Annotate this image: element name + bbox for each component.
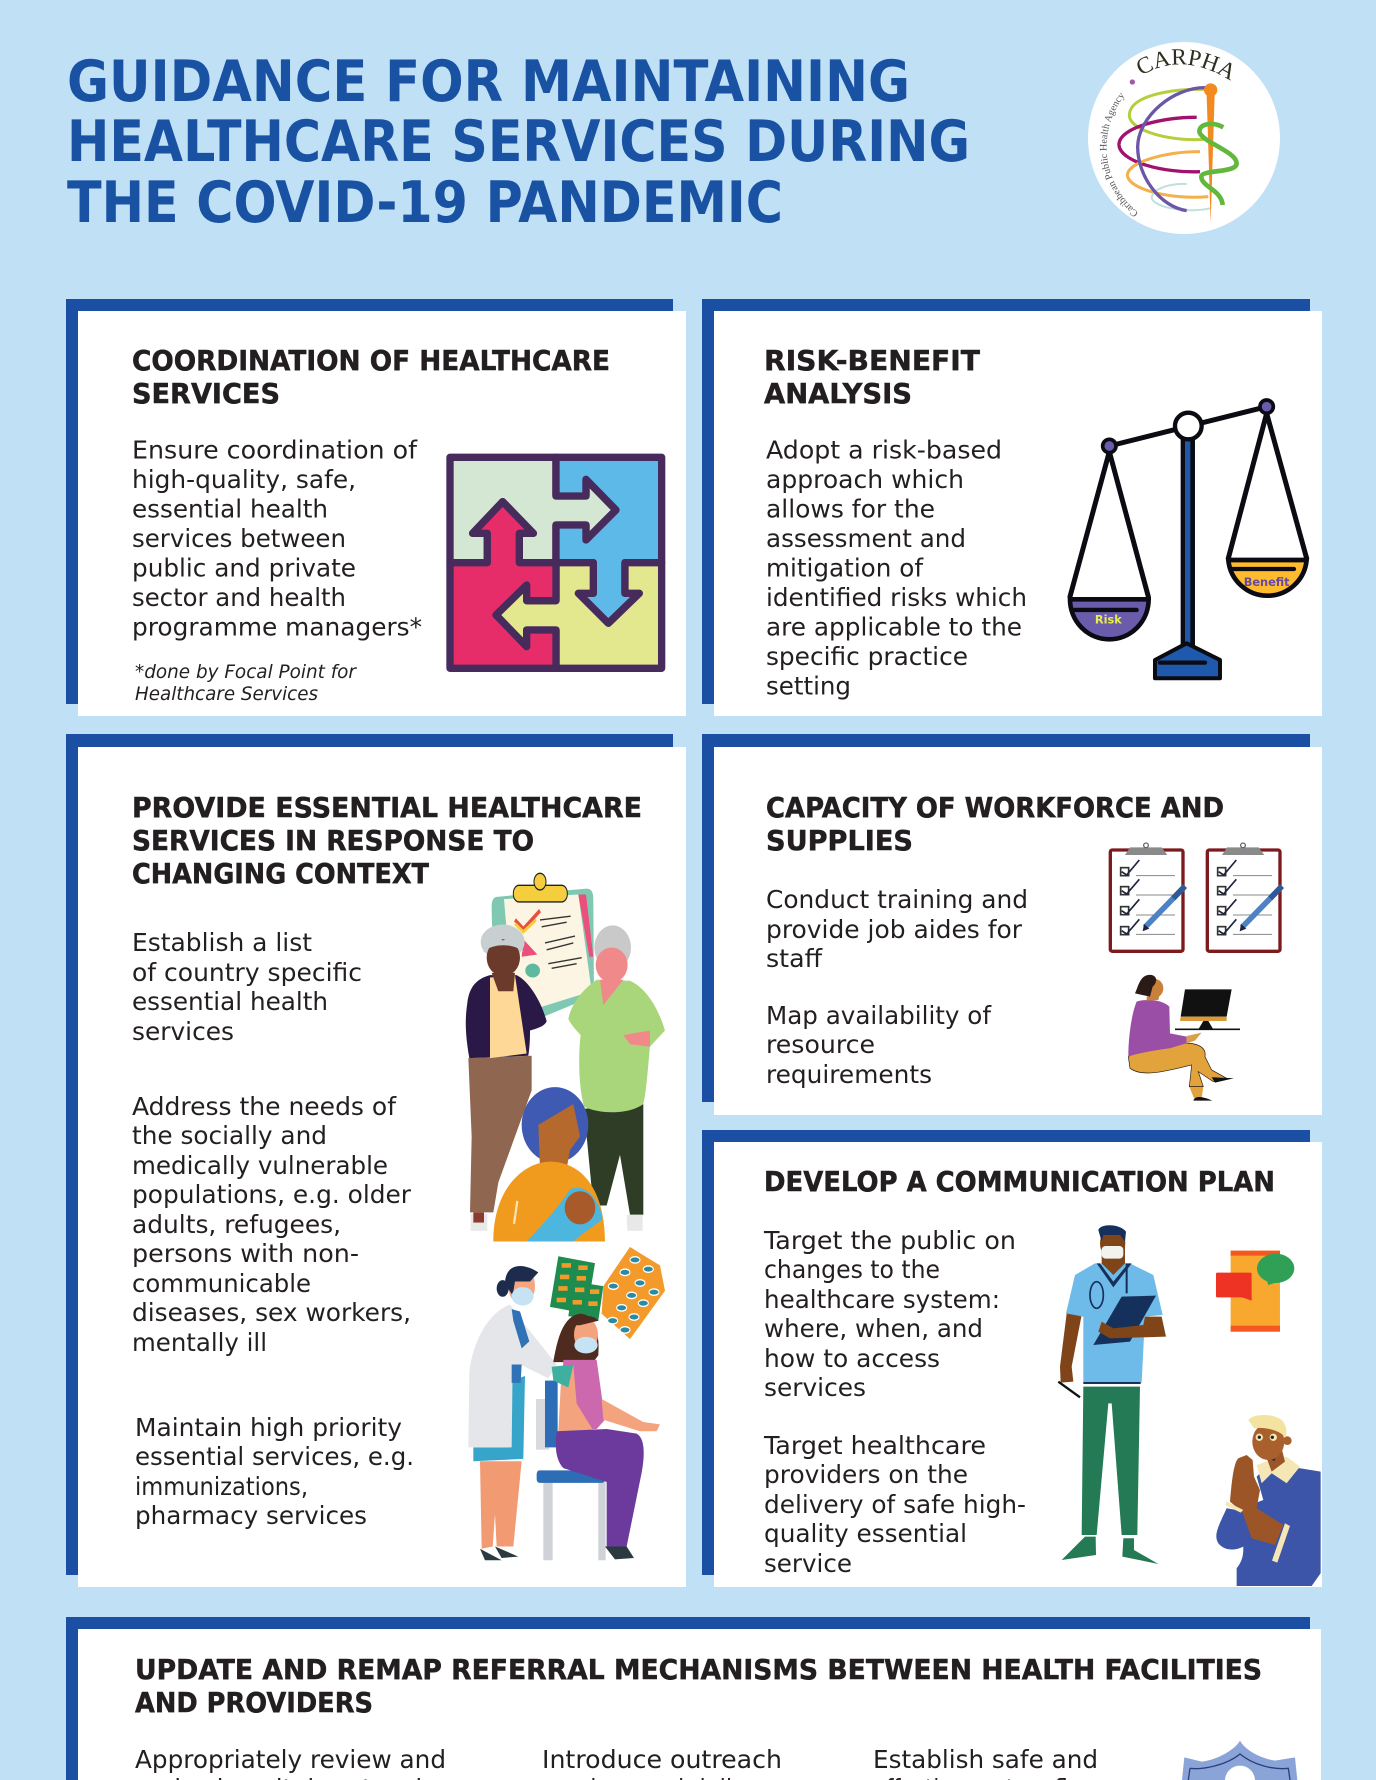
heading: referral: UPDATE AND REMAP REFERRAL MECHANISMS BETWEEN HEALTH FACILITIES [135,1653,1262,1686]
text: risk-benefit body: identified risks which [766,583,1027,612]
text: vulnerable populations: Address the needs of [132,1092,397,1121]
text: vulnerable populations: persons with non- [132,1239,359,1268]
text: vulnerable populations: populations, e.g. older [132,1180,412,1209]
text: coordination body: essential health [132,494,328,524]
text: outreach: Introduce outreach [542,1745,782,1774]
text: training: staff [766,944,823,973]
text: target the public: healthcare system: [764,1285,1000,1314]
text: target the public: where, when, and [764,1314,983,1343]
text: target providers: Target healthcare [763,1431,986,1460]
heading: risk-benefit: ANALYSIS [764,377,912,410]
text: vulnerable populations: mentally ill [132,1328,267,1357]
text: target providers: delivery of safe high- [764,1490,1026,1519]
heading: capacity [766,791,1224,857]
text: coordination body: services between [132,524,346,553]
text: coordination body: high-quality, safe, [132,465,356,494]
heading: referral: AND PROVIDERS [135,1686,373,1719]
text: high priority services: Maintain high priority [135,1413,402,1442]
text: high priority services [135,1413,414,1530]
text: country list: essential health [132,987,328,1016]
title [67,49,970,236]
text: risk-benefit body: approach which [766,465,964,494]
icon: balance scales: Risk [1095,612,1122,626]
title: GUIDANCE FOR MAINTAINING [67,49,910,115]
text: resources [766,1001,992,1089]
footnote: *done by Focal Point for [135,661,357,683]
text: resources: requirements [766,1060,932,1089]
heading: essential services: PROVIDE ESSENTIAL HEALTHCARE [132,791,642,824]
text: coordination body: sector and health [132,583,346,612]
heading: risk-benefit [764,344,980,410]
panel: update and remap referral mechanisms [66,1617,1321,1780]
heading: referral [135,1653,1262,1719]
text: country list: services [132,1017,234,1046]
heading: risk-benefit: RISK-BENEFIT [764,344,980,377]
panel: develop a communication plan [702,1130,1322,1587]
illustration: woman at computer [1128,975,1240,1101]
icon: balance scales: Benefit [1244,575,1290,589]
icon: shield [1182,1741,1297,1780]
footnote [135,661,357,705]
text: target the public: changes to the [764,1255,940,1284]
text: risk-benefit body: setting [766,672,851,700]
illustration: man with glasses gesturing [1216,1415,1321,1586]
text: high priority services: immunizations, [135,1472,308,1501]
text: training [766,885,1028,973]
logo: CARPHA: CARPHA [1137,49,1232,80]
text: resources: Map availability of [766,1001,992,1030]
heading: essential services: SERVICES IN RESPONSE TO [132,824,534,857]
heading: essential services [132,791,642,890]
text: vulnerable populations: communicable [132,1269,311,1298]
footnote: Healthcare Services [135,683,318,705]
text: coordination body [132,436,422,642]
text: high priority services: pharmacy services [135,1501,367,1530]
text: training: Conduct training and [766,885,1028,914]
illustration: doctor vaccinating patient with pill packs [468,1247,665,1560]
title: HEALTHCARE SERVICES DURING [67,109,970,175]
text: risk-benefit body [766,436,1027,700]
text: resources: resource [766,1030,875,1059]
text: vulnerable populations [132,1092,412,1357]
icon: clipboard checklist 2 [1207,843,1282,951]
illustration: older women with clipboard and mother with baby [466,873,665,1241]
text: risk-benefit body: are applicable to the [766,612,1022,642]
text: vulnerable populations: adults, refugees, [132,1210,341,1239]
text: target providers: quality essential [764,1519,967,1548]
text: country list: of country specific [132,958,362,987]
text: risk-benefit body: Adopt a risk-based [766,436,1002,464]
text: risk-benefit body: mitigation of [766,554,924,582]
text: risk-benefit body: specific practice [766,642,968,671]
text: vulnerable populations: diseases, sex workers, [132,1298,411,1327]
logo: CARPHA: Caribbean Public Health Agency [1100,92,1138,216]
icon: clipboard checklist 1 [1110,843,1185,951]
text: coordination body: Ensure coordination of [132,436,418,464]
heading: capacity: SUPPLIES [766,824,913,857]
illustration: nurse with clipboard [1058,1225,1166,1564]
icon: balance scales [1070,400,1307,678]
panel: coordination of healthcare services [66,299,686,716]
logo: CARPHA [1088,42,1280,234]
title: THE COVID-19 PANDEMIC [67,170,783,236]
panel: provide essential healthcare services [66,734,686,1587]
panel: capacity of workforce and supplies [702,734,1322,1115]
text: country list [132,928,362,1046]
text: target providers: service [764,1549,852,1578]
text: coordination body: programme managers* [132,612,422,642]
icon: phone with speech bubbles [1216,1251,1294,1332]
heading: capacity: CAPACITY OF WORKFORCE AND [766,791,1224,824]
text: vulnerable populations: the socially and [132,1121,327,1150]
text: training: provide job aides for [766,915,1023,944]
text: target the public: Target the public on [763,1226,1016,1255]
panel: risk-benefit analysis [702,299,1322,716]
text: country list: Establish a list [132,928,312,957]
text: target providers [763,1431,1026,1578]
heading: communication: DEVELOP A COMMUNICATION PLAN [764,1165,1275,1198]
heading: coordination: SERVICES [132,377,280,410]
text: coordination body: public and private [132,554,356,582]
heading: coordination: COORDINATION OF HEALTHCARE [132,344,610,377]
heading: essential services: CHANGING CONTEXT [132,857,429,890]
text: vulnerable populations: medically vulnerable [132,1151,388,1180]
text: high priority services: essential services, e.g. [135,1442,414,1471]
icon: puzzle arrows [450,457,662,668]
text: patient flow: Establish safe and [873,1745,1098,1774]
text: target the public: how to access [764,1344,940,1373]
text: target the public: services [764,1373,866,1402]
text: risk-benefit body: allows for the [766,494,935,524]
heading: coordination [132,344,610,410]
text: review: Appropriately review and [135,1745,446,1774]
text: risk-benefit body: assessment and [766,524,966,553]
text: target providers: providers on the [764,1460,968,1489]
text: target the public [763,1226,1016,1402]
